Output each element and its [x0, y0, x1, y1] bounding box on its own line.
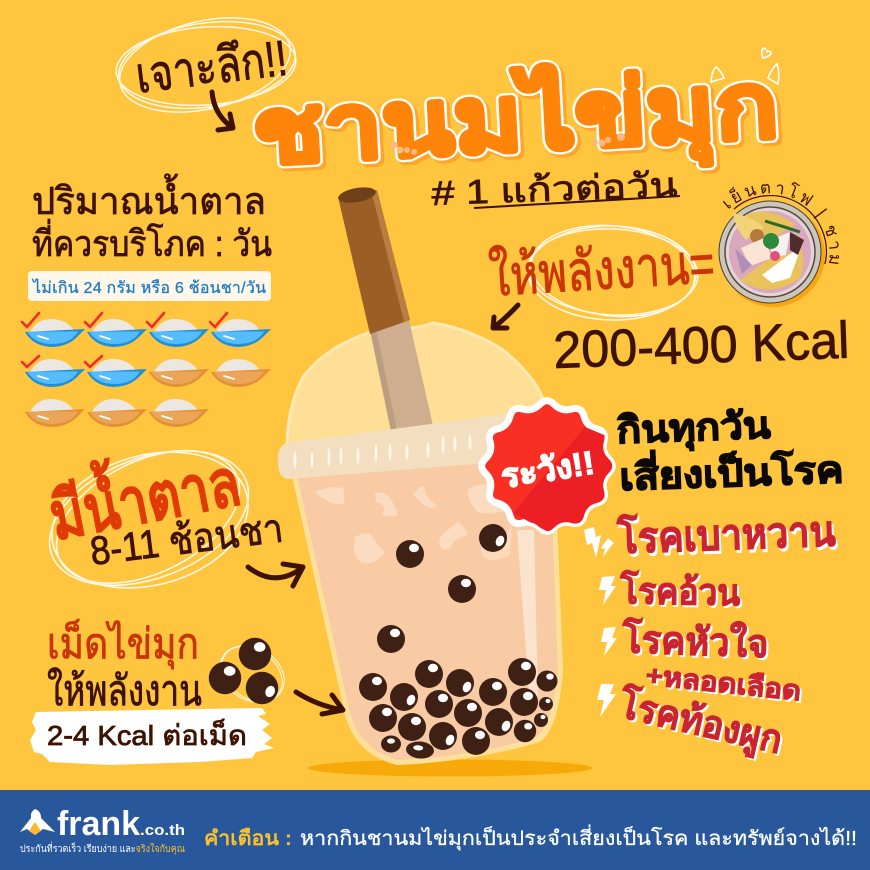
- warning badge: ระวัง!!: [498, 444, 597, 495]
- sugar heading: ปริมาณน้ำตาล: [32, 173, 266, 223]
- noodle bowl: [719, 201, 825, 307]
- pearl heading: ให้พลังงาน: [47, 667, 202, 714]
- sugar heading: ที่ควรบริโภค : วัน: [32, 219, 272, 264]
- headline tag text: เจาะลึก!!: [133, 30, 290, 104]
- pearl heading: [47, 619, 202, 714]
- sugar limit pill: ไม่เกิน 24 กรัม หรือ 6 ช้อนชา/วัน: [31, 278, 266, 297]
- warning badge: [478, 397, 616, 535]
- risk heading: กินทุกวัน: [616, 405, 771, 454]
- footer band: [0, 790, 870, 870]
- logo wordmark: frank: [57, 805, 140, 843]
- title ornament: bubbles: [390, 133, 625, 155]
- straw top: [338, 190, 410, 334]
- footer band: .co.th: [140, 822, 185, 839]
- disease: blood vessel: +หลอดเลือด: [646, 662, 805, 708]
- cup highlight: [517, 530, 538, 705]
- sugar amount value: 8-11 ช้อนชา: [88, 507, 286, 574]
- logo tagline: ประกันที่รวดเร็ว เรียบง่าย และจริงใจกับคุณ: [20, 841, 185, 855]
- disease: heart: โรคหัวใจ: [623, 618, 771, 668]
- arrow: pearls to cup: [296, 692, 343, 714]
- disease: obesity: โรคอ้วน: [619, 569, 741, 613]
- sugar amount heading: มีน้ำตาล: [41, 433, 246, 554]
- warning text: คำเตือน :: [204, 827, 292, 850]
- disease: diabetes: โรคเบาหวาน: [616, 506, 836, 562]
- title: ชานมไข่มุก: [250, 52, 781, 190]
- ice cubes: [315, 484, 512, 564]
- cup body: [292, 430, 563, 765]
- footer band: หากกินชานมไข่มุกเป็นประจำเสี่ยงเป็นโรค และทรัพย์จางได้!!: [300, 824, 857, 851]
- icons: lightning bolts: [584, 527, 617, 717]
- title: ชานมไข่มุก: [250, 52, 781, 190]
- three pearls: [209, 634, 294, 714]
- energy heading: ให้พลังงาน=: [487, 231, 716, 308]
- disease: constipation: โรคท้องผูก: [616, 683, 789, 766]
- shadow under cup: [308, 760, 592, 776]
- brush stroke label: [30, 708, 274, 765]
- pearl heading: เม็ดไข่มุก: [47, 619, 199, 670]
- calories: 200-400 Kcal: [552, 312, 850, 380]
- title: ชานมไข่มุก: [253, 55, 784, 193]
- lid band: [278, 408, 556, 479]
- title ornament: ears and heart: [711, 48, 779, 84]
- sketch circle: headline tag: [110, 3, 301, 127]
- energy heading sketch circle: [526, 218, 700, 324]
- cup: [278, 185, 592, 777]
- arrow: tag to title: [212, 92, 233, 130]
- brush stroke label: 2-4 Kcal ต่อเม็ด: [47, 718, 247, 751]
- disease: blood vessel: +หลอดเลือด: [644, 660, 803, 706]
- dome lid: [287, 323, 552, 460]
- arrow: sugar to cup: [248, 564, 303, 586]
- sugar amount sketch circle: [30, 424, 268, 611]
- disease: diabetes: โรคเบาหวาน: [618, 509, 838, 565]
- sugar limit pill: [28, 271, 271, 301]
- arrow: energy to cup: [493, 305, 518, 328]
- disease: obesity: โรคอ้วน: [621, 571, 743, 615]
- risk heading: [616, 405, 844, 498]
- noodle name on curve: เย็นตาโฟ | ชาม: [722, 182, 840, 264]
- risk heading: เสี่ยงเป็นโรค: [619, 443, 844, 498]
- tapioca pearls: [359, 524, 558, 760]
- disease: constipation: โรคท้องผูก: [614, 681, 787, 764]
- disease: heart: โรคหัวใจ: [621, 616, 769, 666]
- straw inside dome: [370, 320, 434, 436]
- sugar bowls: [22, 313, 271, 427]
- subtitle: one cup per day: # 1 แก้วต่อวัน: [431, 166, 678, 213]
- icon: penguin logo: [20, 809, 55, 835]
- sugar heading: [32, 173, 272, 264]
